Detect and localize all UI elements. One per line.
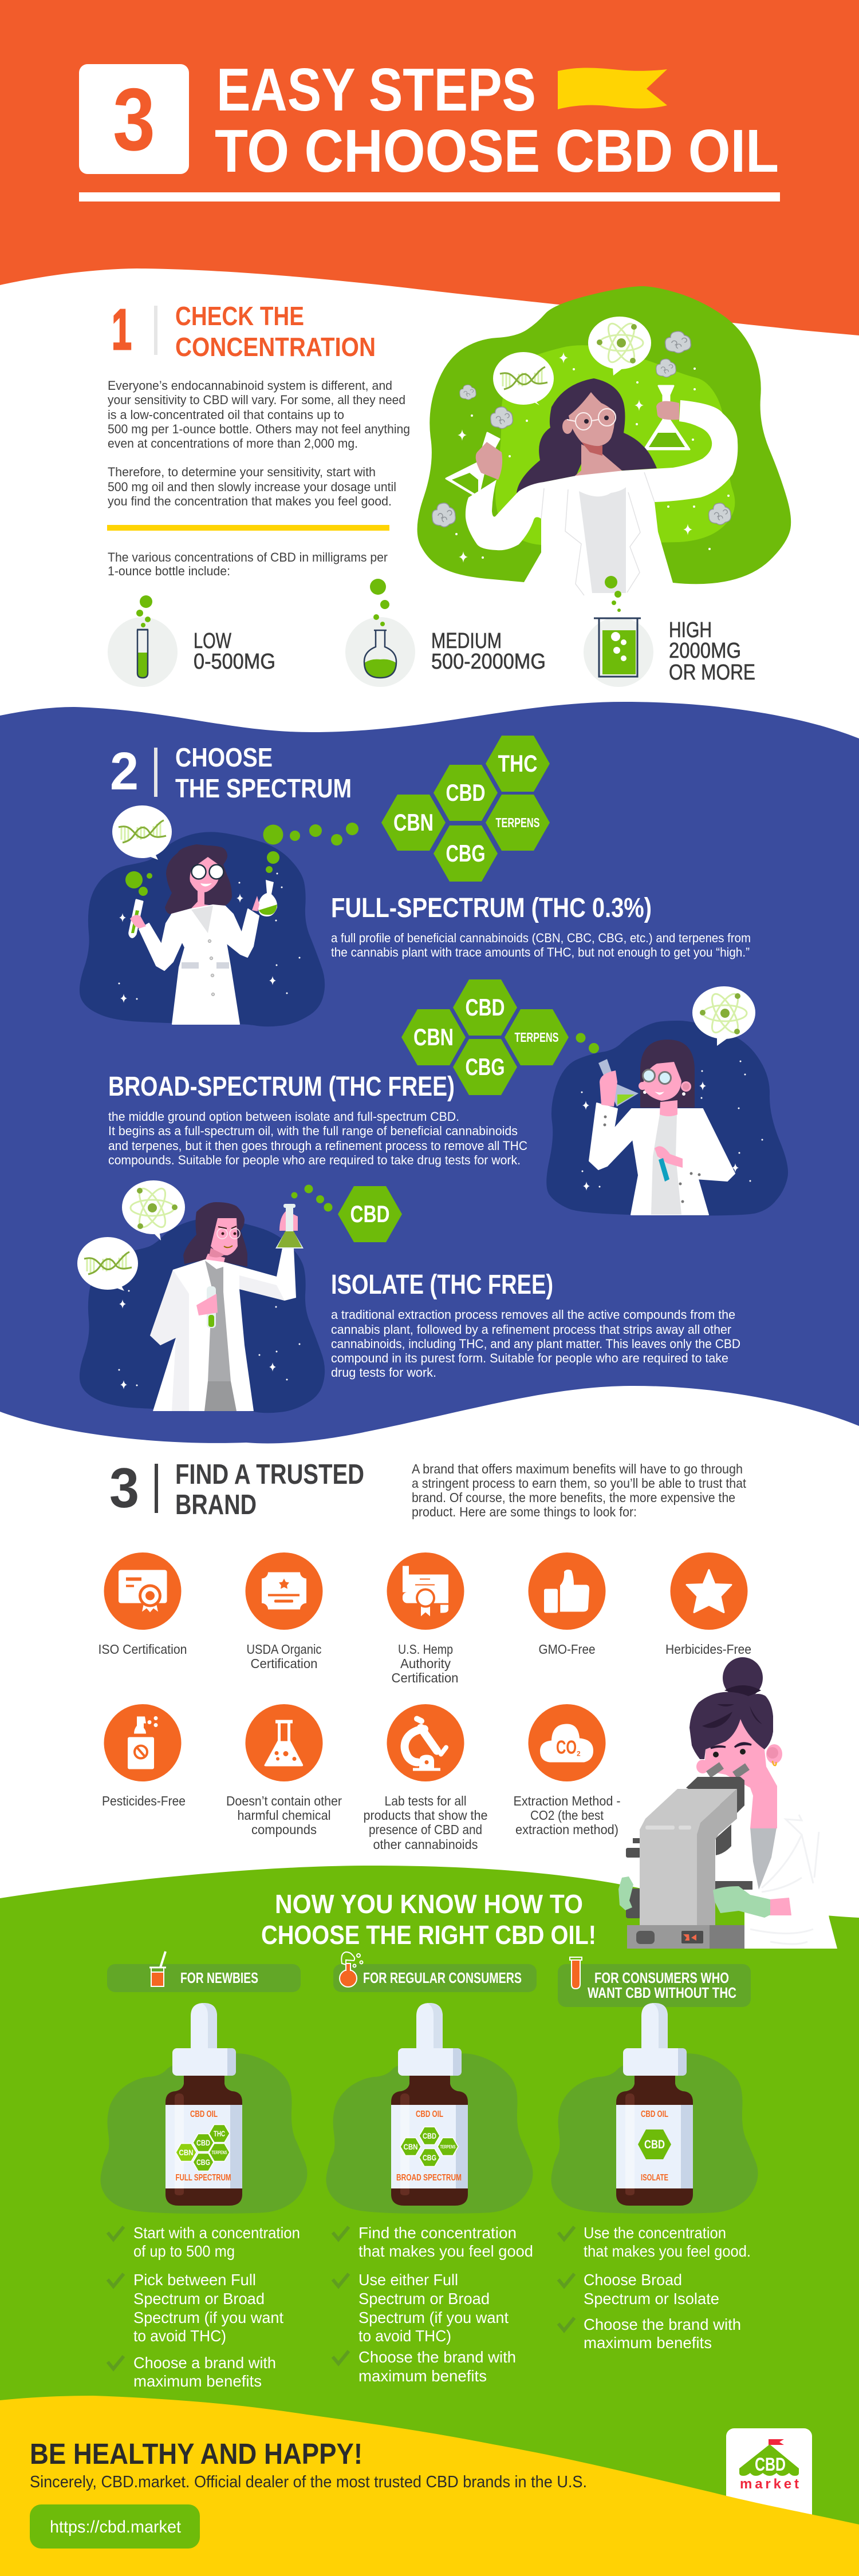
lab coat (150, 1248, 296, 1411)
label: BROAD SPECTRUM (396, 2173, 462, 2183)
shirt (651, 1115, 681, 1215)
label: FULL SPECTRUM (175, 2173, 231, 2183)
hair shading (702, 1704, 762, 1728)
step 2 heading: 2 (110, 741, 139, 801)
hair (517, 378, 657, 493)
checklist: regular consumers (333, 2224, 533, 2385)
labels: row 2: extraction method) (515, 1822, 618, 1837)
face (643, 1062, 681, 1101)
dropper (166, 2003, 242, 2206)
hexagon group: full spectrum: TERPENS (496, 815, 539, 830)
header orange wave (0, 0, 859, 335)
labels: row 2: harmful chemical (237, 1808, 331, 1823)
logo: CBD market (726, 2428, 812, 2531)
checklist: newbies: to avoid THC) (133, 2327, 226, 2345)
step 1 intro text: 500 mg per 1-ounce bottle. Others may not feel anything (108, 422, 410, 436)
text: isolate description: cannabinoids, including THC, and any plant matter. This leaves only the CBD (331, 1337, 740, 1351)
text: full-spectrum description: the cannabis plant with trace amounts of THC, but not enough to get you “high.” (331, 945, 750, 959)
glasses and eyes (567, 409, 616, 430)
labels: row 1 (98, 1642, 751, 1685)
label: CBD (644, 2138, 665, 2151)
icon: beaker with straw (149, 1951, 166, 1986)
checklist: consumers without THC: Use the concentration (584, 2224, 726, 2242)
step 2 heading: THE SPECTRUM (175, 773, 352, 803)
step 3 heading: BRAND (175, 1490, 257, 1520)
text: isolate description: a traditional extraction process removes all the active compounds from the (331, 1307, 735, 1322)
tag: for consumers who want CBD without THC: WANT CBD WITHOUT THC (588, 1984, 736, 2001)
test tube and hand (129, 900, 146, 937)
footer text: Sincerely, CBD.market. Official dealer of the most trusted CBD brands in the U.S. (30, 2473, 587, 2491)
labels: row 1: USDA Organic (246, 1642, 322, 1657)
label: high (669, 618, 755, 685)
label: CBD OIL (416, 2109, 443, 2119)
neck shadow (209, 1248, 224, 1258)
label (391, 2093, 468, 2195)
hair (165, 844, 232, 914)
tag: for regular consumers: FOR REGULAR CONSUMERS (363, 1969, 522, 1986)
heading: isolate: ISOLATE (THC FREE) (331, 1270, 553, 1300)
checklist: consumers without THC: Choose Broad (584, 2271, 682, 2289)
logo: CBD market: market (740, 2476, 799, 2492)
face (211, 1218, 238, 1255)
microscope eyepieces (708, 1765, 747, 1775)
label: low: 0-500MG (194, 650, 275, 674)
green bubbles (576, 1033, 599, 1053)
checklist: consumers without THC: that makes you feel good. (584, 2242, 751, 2260)
icons: grey puffs (432, 331, 731, 527)
checklist: regular consumers: Choose the brand with (358, 2348, 516, 2366)
smile (200, 883, 212, 886)
labels: row 2: Lab tests for all (385, 1793, 466, 1808)
label: high: OR MORE (669, 661, 755, 685)
step 2 heading: CHOOSE (175, 742, 273, 772)
text: isolate description: cannabis plant, followed by a refinement process that strips away all other (331, 1322, 731, 1337)
yellow divider bar (107, 525, 389, 531)
shirt (579, 487, 626, 593)
label: TERPENS (212, 2150, 227, 2155)
label: medium: MEDIUM (431, 629, 502, 653)
hexagon group: full spectrum: CBD (446, 779, 486, 806)
heading: full-spectrum: FULL-SPECTRUM (THC 0.3%) (331, 893, 652, 923)
labels: row 1: ISO Certification (98, 1642, 187, 1657)
dark blue blob (546, 1021, 788, 1216)
labels: row 2: Extraction Method - (513, 1793, 621, 1808)
lab coat (733, 1786, 837, 1949)
labels: row 1: U.S. Hemp (398, 1642, 453, 1657)
checklist: consumers without THC: maximum benefits (584, 2334, 712, 2352)
concentration level: high (584, 576, 755, 687)
glasses (643, 1069, 671, 1084)
tag: for newbies (107, 1951, 301, 1992)
tag: for newbies: FOR NEWBIES (180, 1969, 258, 1986)
hexagon group: broad spectrum: CBN (413, 1024, 454, 1050)
coat lines (750, 1815, 819, 1944)
face (190, 857, 222, 892)
neck and shoulder (750, 1767, 777, 1828)
lab coat (139, 905, 259, 1024)
hexagon group: broad spectrum: CBD (465, 994, 505, 1021)
step 3 intro text: a stringent process to earn them, so you’ll be able to trust that (412, 1476, 747, 1491)
microscope knobs and stage (626, 1838, 752, 1918)
dark blue blob (80, 1218, 325, 1413)
step 3 intro text (412, 1461, 747, 1519)
product: broad spectrum bottle (326, 2003, 533, 2214)
checklist: regular consumers: Spectrum (if you want (358, 2309, 509, 2326)
labels: row 2: compounds (251, 1822, 317, 1837)
microscope head (686, 1777, 744, 1813)
icon: USDA organic certification (245, 1552, 323, 1630)
face (704, 1719, 766, 1788)
checklist: regular consumers: that makes you feel good (358, 2242, 533, 2260)
shirt (205, 1261, 231, 1381)
concentrations intro text: 1-ounce bottle include: (108, 564, 230, 578)
lab coat (589, 1103, 735, 1215)
round flask and hand (252, 880, 277, 916)
green bubbles (291, 1185, 332, 1211)
text: isolate description: drug tests for work. (331, 1365, 436, 1380)
hair (689, 1692, 773, 1759)
step 3 intro text: brand. Of course, the more benefits, the more expensive the (412, 1490, 735, 1505)
shirt lower part (204, 1381, 237, 1411)
ears and earrings (639, 1081, 691, 1096)
blue tube and hand (655, 1146, 683, 1182)
label: medium (431, 629, 546, 674)
icon: beaker (584, 576, 653, 687)
microscope lower dark body (716, 1824, 731, 1855)
text: broad-spectrum description: It begins as a full-spectrum oil, with the full range of beneficial cannabinoids (108, 1124, 518, 1138)
buttons (208, 940, 214, 996)
blob (101, 2053, 307, 2214)
hexagon group: full spectrum (381, 736, 550, 882)
smile (655, 1092, 664, 1095)
step 1 heading (112, 298, 376, 362)
microscope side (697, 1789, 737, 1925)
concentration level: low (108, 595, 275, 687)
microscope body (640, 1789, 737, 1925)
checklist: consumers without THC (558, 2224, 751, 2352)
checklist: regular consumers: maximum benefits (358, 2367, 487, 2385)
footer heading: BE HEALTHY AND HAPPY! (30, 2437, 362, 2470)
text: full-spectrum description: a full profile of beneficial cannabinoids (CBN, CBC, CBG, etc.) and terpenes from (331, 931, 751, 945)
text: broad-spectrum description: the middle ground option between isolate and full-spectrum CBD. (108, 1109, 459, 1124)
checklist: newbies: maximum benefits (133, 2372, 262, 2390)
shirt (750, 1828, 777, 1890)
step 2 heading (110, 741, 352, 803)
neck (660, 1100, 677, 1116)
concentration level: medium (345, 579, 546, 687)
hair bun (723, 1657, 763, 1698)
label: high: 2000MG (669, 639, 741, 663)
step 3 heading: 3 (109, 1456, 139, 1519)
text: broad-spectrum description: compounds. Suitable for people who are required to take drug tests for work. (108, 1153, 521, 1167)
coat seams (541, 472, 655, 595)
illustration: woman at microscope (618, 1657, 837, 1949)
speech bubble: atom (122, 1180, 185, 1240)
step 3 heading: FIND A TRUSTED (175, 1459, 364, 1490)
label: CBN (403, 2142, 418, 2151)
label: high: HIGH (669, 618, 712, 642)
step 1 heading: CONCENTRATION (175, 332, 376, 362)
coat buttons (604, 1115, 701, 1203)
concentrations intro text (108, 550, 388, 578)
step 1 intro text: you find the concentration that makes you feel good. (108, 494, 392, 508)
text: broad-spectrum description: and terpenes, but it then goes through a refinement process to remove all THC (108, 1139, 527, 1153)
labels: row 1: GMO-Free (538, 1642, 596, 1657)
icon: round flask (345, 579, 415, 687)
step 3 heading (109, 1456, 364, 1520)
icon: round flask (340, 1952, 363, 1987)
labels: row 2: presence of CBD and (369, 1822, 482, 1837)
title: TO CHOOSE CBD OIL (215, 117, 779, 185)
panel: footer (0, 2396, 859, 2576)
label: CBD (196, 2138, 210, 2147)
green bubbles (125, 823, 358, 896)
labels: row 2 (102, 1793, 621, 1852)
yellow wave background (0, 2396, 859, 2576)
checklist: newbies: Choose a brand with (133, 2354, 276, 2372)
labels: row 1: Herbicides-Free (665, 1642, 751, 1657)
hexagon group: broad spectrum: CBG (465, 1053, 505, 1080)
labels: row 2: products that show the (363, 1808, 488, 1823)
checklist: newbies: of up to 500 mg (133, 2242, 235, 2260)
hair (640, 1040, 695, 1108)
neck shadow (581, 442, 602, 456)
icon: CO2 cloud: CO (556, 1737, 577, 1757)
right flask (644, 386, 689, 449)
tag: for consumers who want CBD without THC: FOR CONSUMERS WHO (594, 1969, 729, 1986)
light green blob (495, 345, 735, 545)
dark green blob (417, 286, 791, 584)
icon: pesticides-free spray (104, 1704, 181, 1781)
step 1 intro text (108, 378, 410, 508)
product: full spectrum bottle (101, 2003, 307, 2214)
coat shading (150, 1270, 285, 1411)
blue wave background (0, 702, 859, 1443)
gloves and forearm (618, 1876, 791, 1918)
flask and hand (598, 1059, 639, 1107)
dropper (616, 2003, 693, 2206)
lab coat and arms (466, 400, 738, 596)
panel: header (0, 0, 859, 335)
sparkles (455, 352, 730, 563)
checklist: newbies (108, 2224, 300, 2390)
speech bubble: DNA (77, 1237, 138, 1291)
icon: test tube (108, 595, 178, 687)
illustration: scientist with blue tube (546, 986, 788, 1216)
pockets (182, 962, 229, 969)
checklist: regular consumers: Use either Full (358, 2271, 458, 2289)
step 3 intro text: A brand that offers maximum benefits will have to go through (412, 1461, 743, 1476)
dark blue blob (80, 832, 325, 1026)
checklist: newbies: Pick between Full (133, 2271, 256, 2289)
title number badge (79, 64, 189, 174)
step 1 intro text: your sensitivity to CBD will vary. For some, all they need (108, 393, 405, 407)
checklist: regular consumers: Spectrum or Broad (358, 2290, 490, 2308)
hexagon group: broad spectrum (401, 979, 569, 1095)
checklist: newbies: Spectrum or Broad (133, 2290, 265, 2308)
label: low (194, 629, 275, 674)
icon: CO2 cloud: 2 (577, 1749, 581, 1757)
title number badge: 3 (113, 70, 155, 169)
illustration: scientist on green blob (417, 286, 791, 596)
glasses and smile (217, 1226, 240, 1247)
green wave background (0, 1866, 859, 2576)
icon: GMO-free thumb (528, 1552, 606, 1630)
labels: row 1: Authority (400, 1656, 451, 1671)
logo: CBD market: CBD (755, 2454, 786, 2475)
hexagon: isolate: CBD (350, 1200, 389, 1227)
checklist: consumers without THC: Spectrum or Isolate (584, 2290, 719, 2308)
label: low: LOW (194, 629, 231, 653)
step 1 intro text: Everyone’s endocannabinoid system is different, and (108, 378, 392, 393)
step 1 heading: CHECK THE (175, 301, 304, 331)
speech bubble: DNA (493, 352, 554, 405)
label (616, 2093, 693, 2195)
neck (190, 890, 213, 912)
checklist: newbies: Spectrum (if you want (133, 2309, 283, 2326)
labels: row 1: Certification (251, 1656, 317, 1671)
button: website link (30, 2504, 200, 2549)
tag: for regular consumers (333, 1952, 537, 1992)
panel: recommendations (0, 1657, 859, 2576)
title underline (79, 192, 780, 202)
tag: for consumers who want CBD without THC (558, 1957, 751, 2007)
ear (562, 419, 573, 434)
label: CBG (423, 2153, 436, 2162)
test tube (207, 1286, 216, 1328)
ear (766, 1744, 782, 1765)
checklist: newbies: Start with a concentration (133, 2224, 300, 2242)
hexagon group: full spectrum: CBN (393, 809, 434, 836)
illustration: scientist with tube and flask (80, 805, 358, 1026)
hand with tube (196, 1294, 218, 1315)
microscope base (627, 1925, 744, 1949)
concentrations intro text: The various concentrations of CBD in milligrams per (108, 550, 388, 564)
step 1 heading: 1 (112, 298, 132, 362)
icon: CO2 cloud (528, 1704, 606, 1781)
label: THC (214, 2129, 225, 2138)
microscope highlights (645, 1826, 691, 1830)
sparkles (118, 872, 300, 1003)
label (166, 2093, 242, 2195)
label: ISOLATE (641, 2173, 668, 2183)
label: TERPENS (440, 2144, 456, 2150)
labels: row 2: Doesn’t contain other (226, 1793, 342, 1808)
step 1 intro text: Therefore, to determine your sensitivity, start with (108, 465, 376, 479)
heading: now you know (261, 1889, 596, 1950)
speech bubble: atom (588, 317, 651, 376)
step 1 intro text: even at concentrations of more than 2,000 mg. (108, 436, 358, 451)
glasses (191, 864, 223, 879)
hexagon group: broad spectrum: TERPENS (514, 1030, 559, 1045)
labels: row 2: Pesticides-Free (102, 1793, 186, 1808)
icon: lab tests microscope (387, 1704, 464, 1781)
text: full-spectrum description (331, 931, 751, 959)
label: CBG (196, 2158, 210, 2167)
sparkles (118, 1290, 300, 1389)
icon: herbicides-free star (670, 1552, 748, 1630)
dropper (391, 2003, 468, 2206)
text: isolate description (331, 1307, 740, 1380)
face (569, 392, 614, 447)
checklist: consumers without THC: Choose the brand with (584, 2316, 741, 2333)
panel: step 3 find a trusted brand (98, 1456, 751, 1852)
shirt (191, 906, 213, 933)
hands (476, 442, 502, 480)
hexagon group: full spectrum: THC (498, 750, 537, 777)
title (215, 56, 779, 185)
heading: now you know: NOW YOU KNOW HOW TO (275, 1889, 583, 1919)
text: broad-spectrum description (108, 1109, 527, 1167)
icon: chemical flask (245, 1704, 323, 1781)
title: EASY STEPS (216, 56, 536, 124)
blob (326, 2053, 533, 2214)
label: CBN (179, 2148, 194, 2157)
label: CBD OIL (641, 2109, 668, 2119)
hair (183, 1202, 247, 1267)
speech bubble: DNA (112, 805, 172, 860)
icon: U.S. hemp authority certification (387, 1552, 464, 1630)
illustration: scientist raising flask (77, 1180, 332, 1413)
checklist: regular consumers: to avoid THC) (358, 2327, 451, 2345)
heading: now you know: CHOOSE THE RIGHT CBD OIL! (261, 1920, 596, 1950)
sparkles (581, 1060, 763, 1191)
panel: step 1 check the concentration (107, 286, 791, 687)
hexagon: isolate (338, 1186, 402, 1242)
scientist body (466, 378, 738, 596)
step 1 intro text: is a low-concentrated oil that contains up to (108, 408, 344, 422)
labels: row 1: Certification (392, 1670, 458, 1685)
label: CBD (423, 2131, 436, 2140)
left cheek (696, 1760, 709, 1773)
icon: ISO certification (104, 1552, 181, 1630)
left flask (446, 433, 499, 497)
raised flask (275, 1204, 304, 1249)
button: website link: https://cbd.market (50, 2518, 182, 2537)
icon: test tube (570, 1957, 582, 1989)
eyes and brows (711, 1743, 751, 1757)
blob (551, 2053, 758, 2214)
checklist: regular consumers: Find the concentration (358, 2224, 517, 2242)
label: medium: 500-2000MG (431, 650, 546, 674)
speech bubble: atom (692, 986, 755, 1046)
product: isolate bottle (551, 2003, 758, 2214)
labels: row 2: other cannabinoids (373, 1837, 478, 1852)
label: CBD OIL (190, 2109, 218, 2119)
icon: yellow flag (558, 68, 667, 109)
step 3 intro text: product. Here are some things to look for: (412, 1504, 637, 1519)
neck (205, 1254, 225, 1269)
panel: step 2 choose the spectrum (0, 702, 859, 1443)
labels: row 2: CO2 (the best (530, 1808, 604, 1823)
step 1 intro text: 500 mg oil and then slowly increase your dosage until (108, 480, 396, 494)
hexagon group: full spectrum: CBG (446, 840, 486, 867)
neck (575, 444, 622, 496)
heading: broad-spectrum: BROAD-SPECTRUM (THC FREE) (108, 1072, 455, 1102)
text: isolate description: compound in its purest form. Suitable for people who are required to take (331, 1351, 728, 1365)
